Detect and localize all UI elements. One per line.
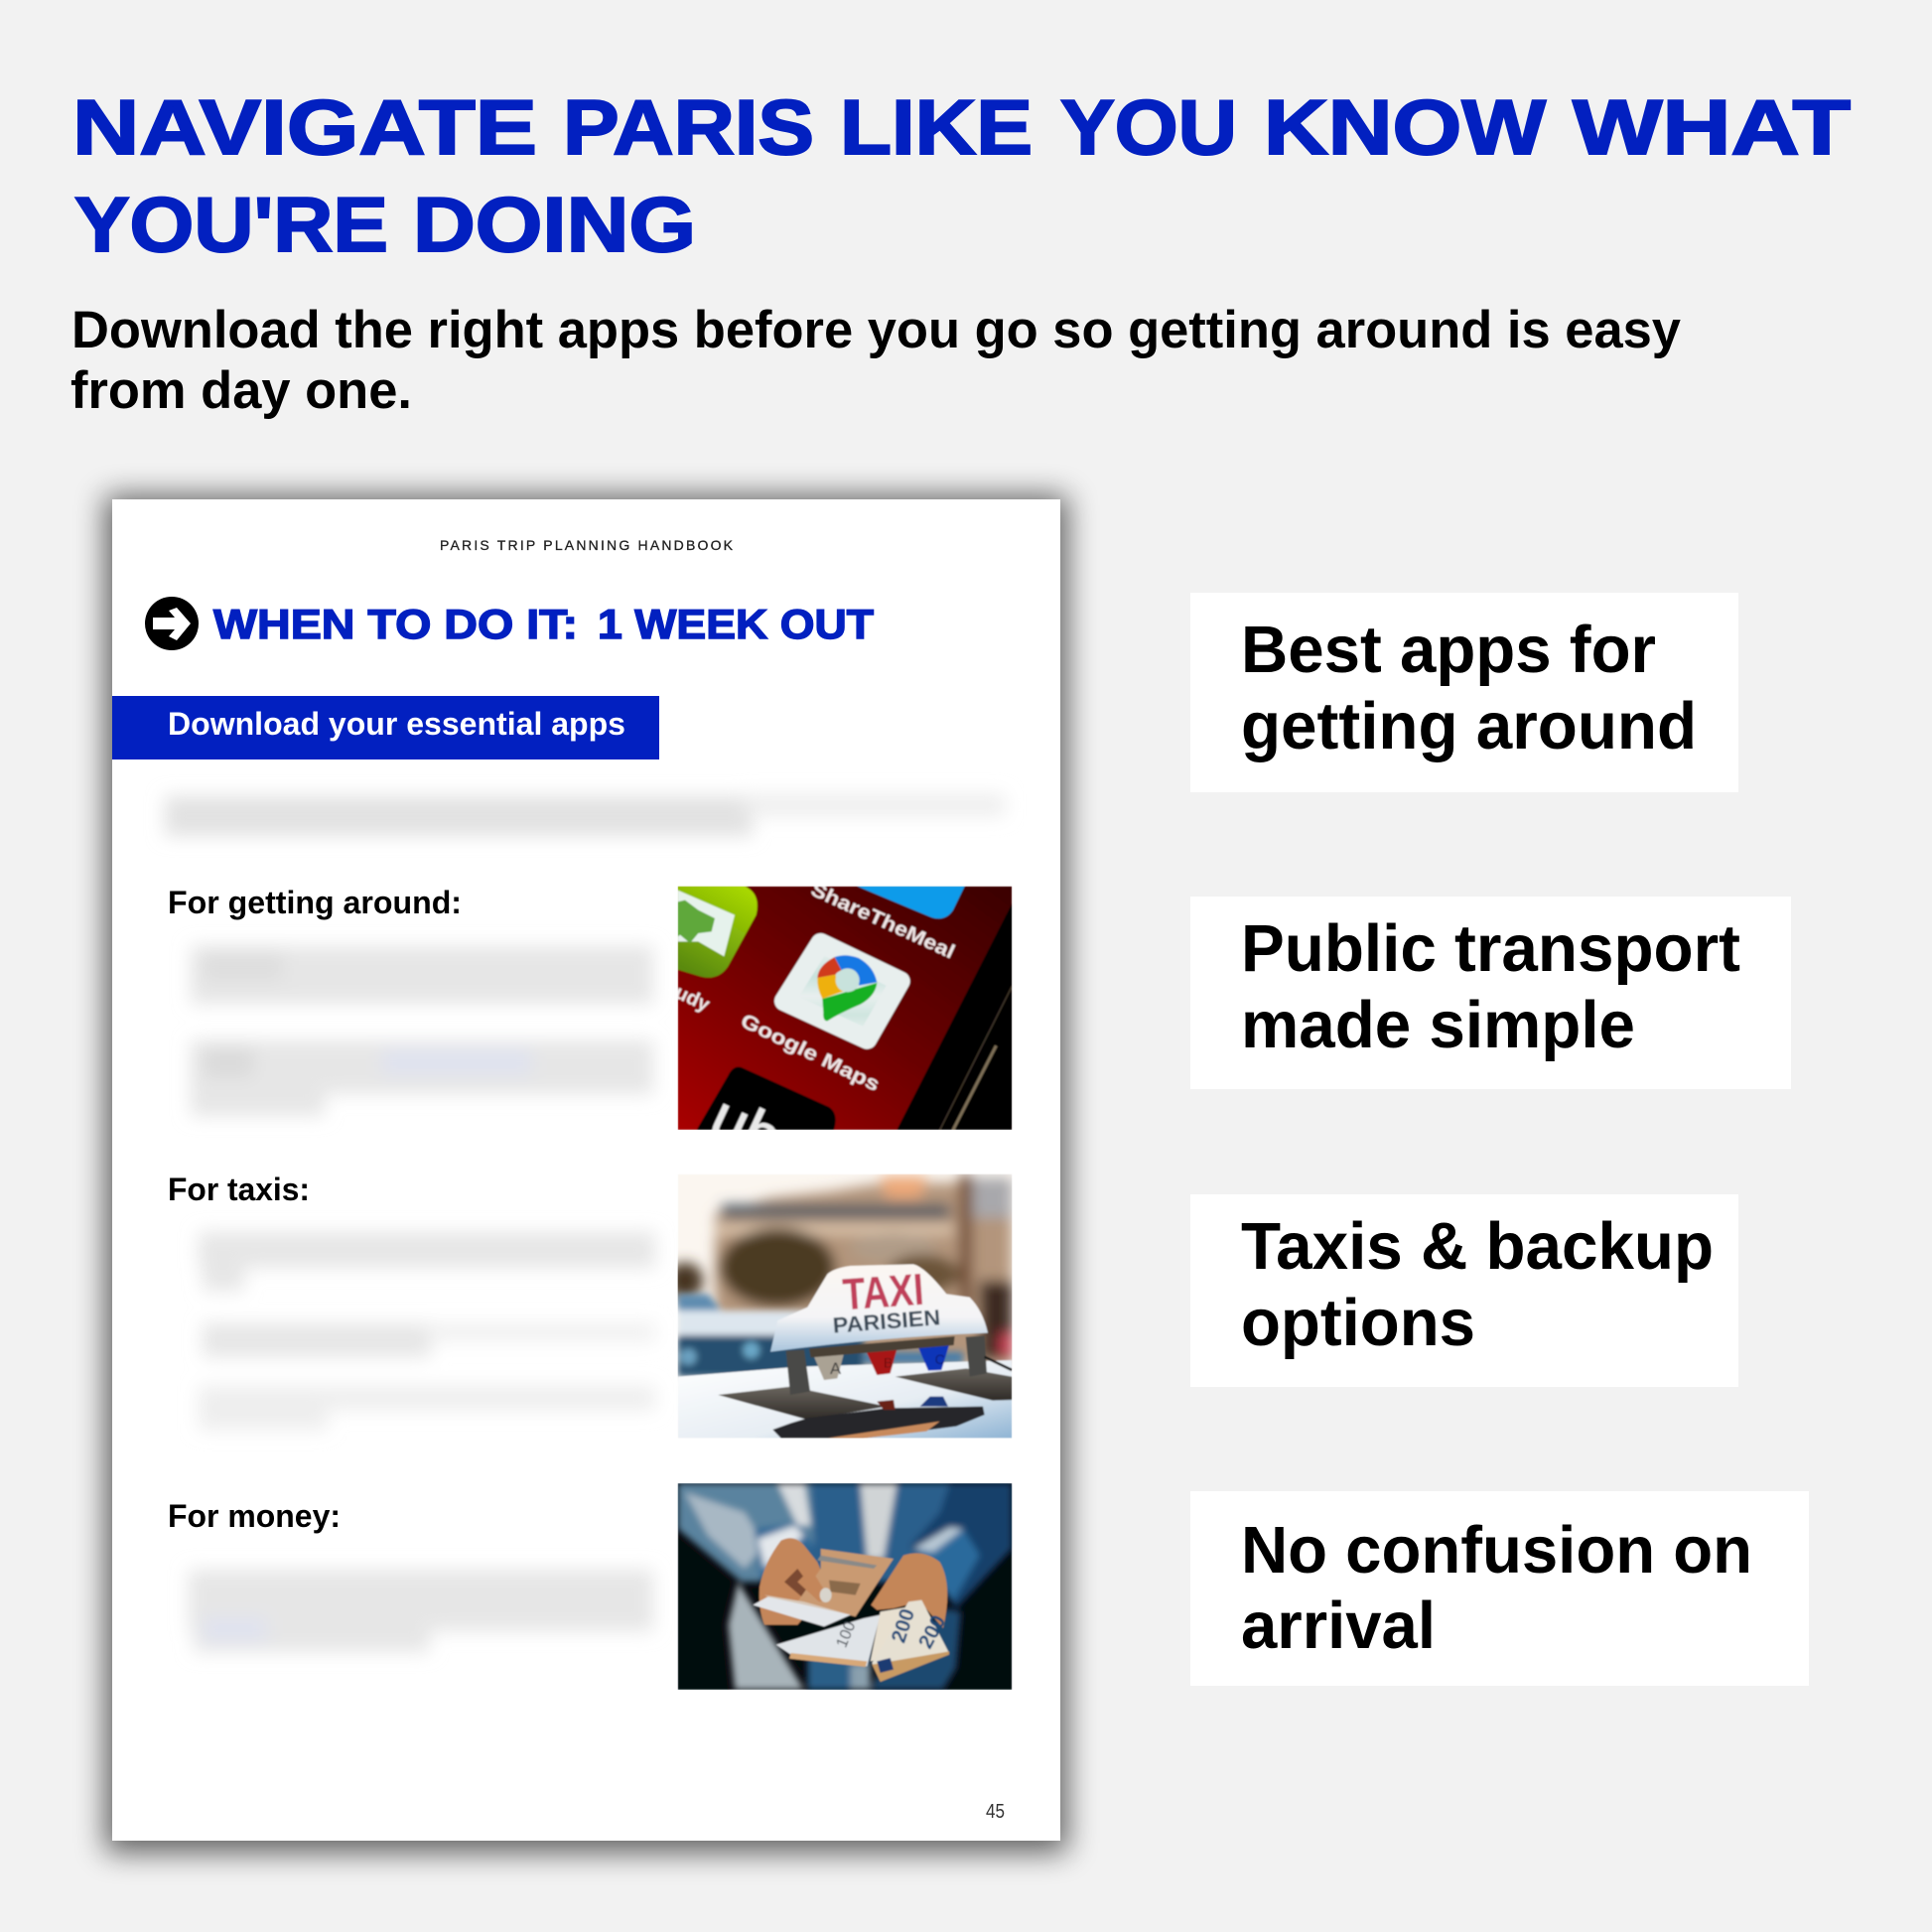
- card: taxis: [1190, 1194, 1738, 1387]
- blurred street background: [667, 1174, 1013, 1367]
- banknote denominations: 100: [834, 1619, 859, 1650]
- sign lettering: TAXI: [841, 1264, 925, 1319]
- blue banner: Download your essential apps: [168, 706, 625, 742]
- phone edge: [897, 903, 1012, 1130]
- uber tile: [697, 1067, 836, 1130]
- title: NAVIGATE: [72, 83, 537, 171]
- card: taxis: options: [1241, 1286, 1475, 1360]
- lower clothing: [728, 1582, 804, 1690]
- card: taxis: Taxis & backup: [1241, 1209, 1714, 1284]
- title: LIKE: [840, 83, 1033, 171]
- middle bills: [776, 1615, 881, 1666]
- page number: 45: [986, 1801, 1005, 1823]
- card: no confusion: arrival: [1241, 1588, 1436, 1663]
- sign underbar: [809, 1336, 955, 1357]
- title: YOU'RE: [74, 181, 388, 268]
- brackets: [786, 1349, 810, 1395]
- title: WHAT: [1573, 83, 1851, 171]
- banknote denominations: 200: [888, 1606, 919, 1646]
- photo: Paris taxi sign: A: [830, 1359, 842, 1378]
- left bills: [797, 1549, 894, 1616]
- card: public transport: [1190, 897, 1791, 1089]
- title: PARIS: [563, 83, 814, 171]
- banknote denominations: 200: [914, 1611, 950, 1652]
- blurred text: money: [189, 1570, 653, 1652]
- pennants: [814, 1353, 844, 1380]
- reflection: [827, 1422, 940, 1439]
- maps pin: [817, 957, 842, 978]
- card: no confusion: No confusion on: [1241, 1513, 1752, 1587]
- car roof: [678, 1360, 1012, 1439]
- card: no confusion: [1190, 1491, 1809, 1686]
- maps tile: [784, 943, 900, 1039]
- photo: Paris taxi sign: B: [884, 1354, 893, 1370]
- subtitle: from day one.: [70, 361, 412, 420]
- photo: Paris taxi sign: C: [935, 1351, 945, 1367]
- section heading: money: For money:: [168, 1498, 341, 1534]
- sweater: [804, 1483, 950, 1583]
- app labels: ShareTheMeal: [807, 879, 958, 963]
- section heading: taxis: For taxis:: [168, 1172, 310, 1207]
- card: best apps: Best apps for: [1241, 613, 1656, 687]
- page running header: PARIS TRIP PLANNING HANDBOOK: [440, 537, 734, 553]
- blue app: [857, 887, 965, 918]
- blue banner: [112, 696, 659, 759]
- photo: phone apps with Google Maps: [677, 886, 1013, 1130]
- photo: Paris taxi sign: PARISIEN: [832, 1305, 941, 1338]
- page heading: [213, 601, 874, 647]
- panel: handbook page: [105, 495, 1067, 1853]
- card: best apps: getting around: [1241, 689, 1697, 763]
- title: [72, 83, 1851, 268]
- blurred text: taxis: [199, 1232, 655, 1430]
- app labels: [677, 886, 957, 1130]
- sign dome: [770, 1264, 988, 1352]
- subtitle: [70, 301, 1682, 420]
- photo: Paris taxi sign: [667, 1174, 1013, 1439]
- right bills: [870, 1606, 905, 1662]
- app labels: Google Maps: [737, 1010, 883, 1096]
- page heading: 1 WEEK OUT: [598, 601, 874, 647]
- title: KNOW: [1264, 83, 1546, 171]
- mount plates: [718, 1387, 887, 1420]
- section heading: getting around: For getting around:: [168, 885, 462, 920]
- title: DOING: [413, 181, 696, 268]
- page drop shadow: [105, 495, 1067, 1853]
- subtitle: Download the right apps before you go so getting around is easy: [71, 301, 1682, 359]
- title: YOU: [1060, 83, 1237, 171]
- icon: arrow in black circle: [145, 597, 199, 650]
- app labels: udy: [672, 982, 713, 1017]
- card: public transport: Public transport: [1241, 911, 1740, 986]
- card: public transport: made simple: [1241, 988, 1635, 1062]
- page sheet: [112, 499, 1060, 1841]
- photo: hands holding euro banknotes: [678, 1483, 1012, 1690]
- green app: [678, 887, 758, 978]
- banknote denominations: [834, 1606, 950, 1652]
- blurred text: getting around: [191, 946, 653, 1116]
- page heading: WHEN TO DO IT:: [213, 601, 578, 647]
- blurred intro paragraph: [165, 794, 1005, 836]
- card: best apps: [1190, 593, 1738, 792]
- left hand: [758, 1537, 821, 1626]
- right hand: [871, 1553, 947, 1628]
- app labels: uber: [701, 1082, 841, 1196]
